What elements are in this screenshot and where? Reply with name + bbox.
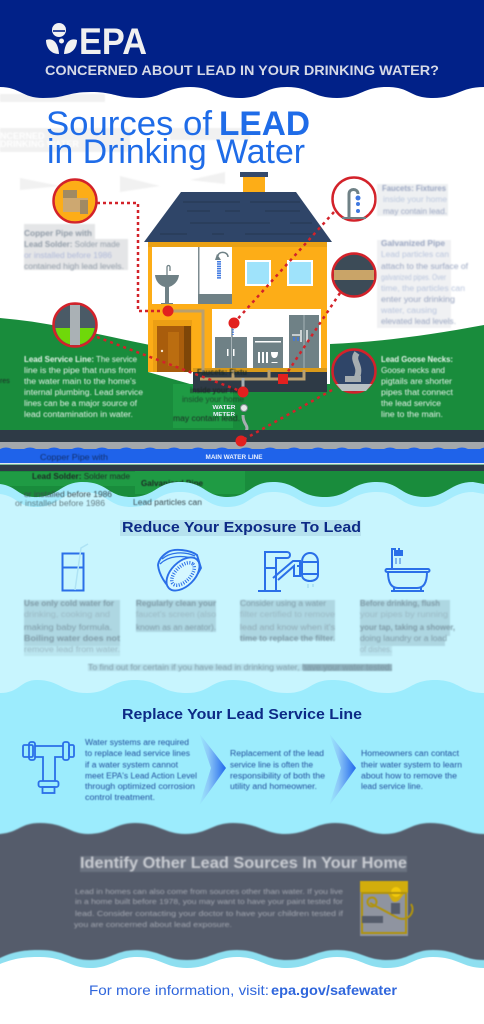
text: step 1: to replace lead service lines	[85, 749, 190, 758]
house body	[148, 242, 327, 372]
text: lead service line description: lead contamination in water.	[24, 410, 133, 419]
main water line label: MAIN WATER LINE	[206, 455, 262, 461]
text: step 1: meet EPA's Lead Action Level	[85, 772, 197, 780]
text: galvanized pipe description: elevated lead levels.	[381, 317, 456, 326]
text: lead service line description: the water main to the home's	[24, 377, 136, 386]
tip: water filter: Consider using a water	[240, 599, 326, 608]
note: have water tested: To find out for certain if you have lead in drinking water, have your water tested.	[88, 663, 392, 672]
icon: paint bucket	[360, 881, 413, 936]
cabinet	[215, 324, 247, 369]
panel: ghost artefacts behind title	[0, 94, 250, 192]
text: step 2: utility and homeowner.	[230, 782, 317, 791]
title: in Drinking Water	[47, 133, 305, 171]
text: footer link: epa.gov/safewater	[271, 982, 398, 998]
tip: cold water	[24, 599, 120, 654]
text: step 3: lead service line.	[361, 782, 423, 791]
tip: cold water: making baby formula.	[24, 623, 112, 632]
dishwasher	[253, 337, 283, 369]
callout: copper pipe with lead solder	[54, 180, 168, 311]
text: step 1: if a water system cannot	[85, 760, 179, 770]
panel: water main	[0, 430, 484, 471]
panel: ghost artefacts behind title: DRINKING WATER	[0, 139, 79, 149]
text: copper pipe description: Copper Pipe with	[24, 229, 92, 238]
text: lead service line description: lines can be a major source of	[24, 399, 138, 408]
text: identify body: lead. Consider contacting your doctor to have your children tested if	[75, 909, 344, 918]
tip: water filter: time to replace the filter.	[240, 634, 335, 643]
tip: cold water: remove lead from water.	[24, 645, 120, 654]
tip: cold water: Boiling water does not	[24, 634, 120, 643]
text: faucets description: Faucets: Fixtures	[382, 184, 447, 193]
text: step 1: Water systems are required	[85, 738, 189, 747]
text: identify body: in a home built before 1978, you may want to have your paint tested for	[75, 897, 344, 906]
text: copper pipe description	[24, 224, 128, 271]
panel: artefact labels over pale wave: or installed before 1986	[24, 490, 113, 499]
title: Sources of	[46, 105, 213, 143]
tip: water filter	[240, 599, 336, 643]
text: lead goose necks description: Lead Goose Necks:	[381, 355, 453, 364]
EPA logo: EPA	[79, 21, 147, 62]
panel: tint blocks behind reduce tips	[24, 600, 450, 671]
arrow: chevron 2	[329, 733, 356, 806]
panel: artefact labels over pale wave	[15, 490, 202, 508]
panel: replace section	[0, 680, 484, 840]
text: galvanized pipe description: galvanized pipes. Over	[381, 273, 446, 282]
foundation	[193, 372, 327, 392]
callout: lead goose necks	[241, 350, 376, 441]
panel: artefact labels over ground: Lead Solder: Solder made	[32, 472, 131, 481]
text: lead service line description: internal plumbing. Lead service	[24, 388, 144, 397]
panel: artefact labels over ground	[0, 368, 247, 488]
callout: lead service line	[54, 304, 243, 392]
heading: identify other lead sources: Identify Other Lead Sources In Your Home	[80, 855, 407, 872]
tip: clean aerator: Regularly clean your	[136, 599, 216, 608]
panel: identify section	[0, 823, 484, 980]
panel: artefact labels over ground: inside your home	[182, 395, 245, 404]
arrow: chevron 1	[199, 733, 226, 806]
text: step 3: about how to remove the	[361, 772, 458, 780]
title: LEAD	[219, 105, 310, 143]
panel: ghost artefacts behind title: NCERNED	[0, 131, 45, 141]
tip: cold water: Use only cold water for	[24, 599, 114, 608]
text: galvanized pipe description: Galvanized Pipe	[381, 239, 446, 248]
text: galvanized pipe description: water, causing	[380, 306, 437, 315]
panel: ground	[0, 318, 484, 500]
text: lead goose necks description: pigtails are shorter	[381, 377, 452, 386]
tip: flush pipes: your pipes by running	[360, 610, 448, 619]
water service pipe	[241, 378, 247, 441]
text: lead service line description: line is the pipe that runs from	[24, 366, 136, 375]
text: reduce tips (blurred)	[24, 599, 455, 672]
icon: faucet with filter	[258, 552, 318, 591]
water meter	[212, 404, 248, 418]
heading: reduce your exposure: Reduce Your Exposure To Lead	[122, 519, 361, 536]
tip: flush pipes	[360, 599, 455, 654]
text: step 2: Replacement of the lead	[230, 749, 324, 758]
door	[153, 320, 192, 372]
text: lead service line description	[24, 355, 144, 419]
tip: water filter: lead and know when it's	[240, 623, 335, 632]
text: step 2: responsibility of both the	[230, 772, 326, 780]
water meter: WATER	[212, 405, 236, 411]
icon: bathtub	[386, 548, 430, 591]
text: lead goose necks description	[381, 355, 454, 419]
text: lead goose necks description: line to the main.	[381, 410, 443, 419]
tip: flush pipes: your tap, taking a shower,	[360, 623, 455, 632]
tip: cold water: drinking, cooking and	[24, 610, 110, 619]
banner headline: CONCERNED ABOUT LEAD IN YOUR DRINKING WATER?	[45, 63, 439, 78]
illustration: house	[144, 172, 332, 441]
EPA logo	[46, 21, 147, 62]
text: step 3: their water system to learn	[361, 760, 462, 770]
tip: water filter: filter certified to remove	[240, 610, 336, 619]
marker dots	[162, 306, 288, 446]
panel: artefact labels over ground: Faucets: Fixtu	[197, 368, 247, 377]
roof	[144, 192, 332, 242]
text: lead goose necks description: Goose necks and	[381, 366, 445, 375]
text: step 2: service line is often the	[230, 760, 314, 770]
heading: replace your lead service line: Replace Your Lead Service Line	[122, 706, 362, 723]
chimney	[240, 172, 268, 193]
panel: artefact labels over ground: Copper Pipe with	[40, 453, 108, 462]
windows	[246, 261, 312, 285]
text: copper pipe description: or installed before 1986	[24, 251, 113, 260]
text: galvanized pipe description: Lead particles can	[381, 250, 449, 259]
text: lead service line description: Lead Service Line: The service	[24, 355, 138, 364]
kitchen	[212, 309, 321, 372]
shower	[215, 252, 228, 279]
icon: glass of water	[62, 544, 88, 590]
icon: pipe tee	[23, 742, 74, 793]
text: faucets description: inside your home	[383, 195, 448, 204]
text: identify body	[74, 887, 344, 929]
text: identify body: you are concerned about lead exposure.	[74, 920, 232, 929]
panel: reduce section wave	[0, 482, 484, 700]
panel: artefact labels over ground: inside your hom	[190, 386, 245, 395]
panel: artefact labels over pale wave: or installed before 1986	[15, 499, 106, 508]
text: copper pipe description: Lead Solder: Solder made	[24, 240, 121, 249]
text: step 1: through optimized corrosion	[85, 782, 195, 791]
text: step 1	[85, 738, 197, 802]
tip: clean aerator: faucet's screen (also	[136, 610, 217, 619]
text: footer link: For more information, visit:	[89, 982, 269, 998]
text: lead goose necks description: pipes that connect	[381, 388, 454, 397]
callout: faucets	[234, 178, 376, 323]
tip: clean aerator: known as an aerator).	[136, 623, 216, 632]
water meter: METER	[213, 412, 235, 418]
refrigerator	[289, 315, 319, 369]
text: galvanized pipe description: time, the particles can	[381, 284, 465, 293]
tip: clean aerator	[136, 599, 217, 632]
panel: artefact labels over ground: may contain lead.	[173, 414, 240, 423]
tip: flush pipes: of dishes.	[360, 645, 392, 654]
panel: artefact labels over pale wave: Lead particles can	[133, 498, 202, 507]
text: step 2	[230, 749, 326, 791]
text: step 1: control treatment.	[85, 793, 155, 802]
bathroom	[152, 247, 232, 304]
text: copper pipe description: contained high lead levels.	[24, 262, 124, 271]
text: identify body: Lead in homes can also come from sources other than water. If you live	[75, 887, 343, 896]
panel: artefact labels over ground: res	[0, 378, 10, 385]
icon: faucet aerator	[158, 550, 206, 597]
panel: lighter ground patches	[0, 384, 245, 494]
callout: galvanized pipe	[283, 254, 376, 379]
panel: footer wave	[0, 950, 484, 1024]
text: faucets description: may contain lead.	[383, 207, 447, 216]
sink	[155, 266, 179, 304]
plumbing pipes	[168, 311, 304, 379]
text: faucets description	[377, 184, 448, 216]
text: step 3	[361, 749, 462, 791]
panel: artefact labels over ground: Galvanized Pipe	[141, 479, 204, 488]
tip: flush pipes: doing laundry or a load	[360, 634, 447, 643]
text: lead goose necks description: the lead service	[381, 399, 442, 408]
panel: header banner	[0, 0, 484, 98]
tip: flush pipes: Before drinking, flush	[360, 599, 440, 608]
text: step 3: Homeowners can contact	[361, 749, 460, 758]
text: galvanized pipe description: attach to the surface of	[381, 262, 469, 271]
text: galvanized pipe description: enter your drinking	[381, 295, 455, 304]
text: footer link	[89, 982, 398, 998]
title	[46, 105, 310, 171]
text: galvanized pipe description	[377, 239, 469, 328]
